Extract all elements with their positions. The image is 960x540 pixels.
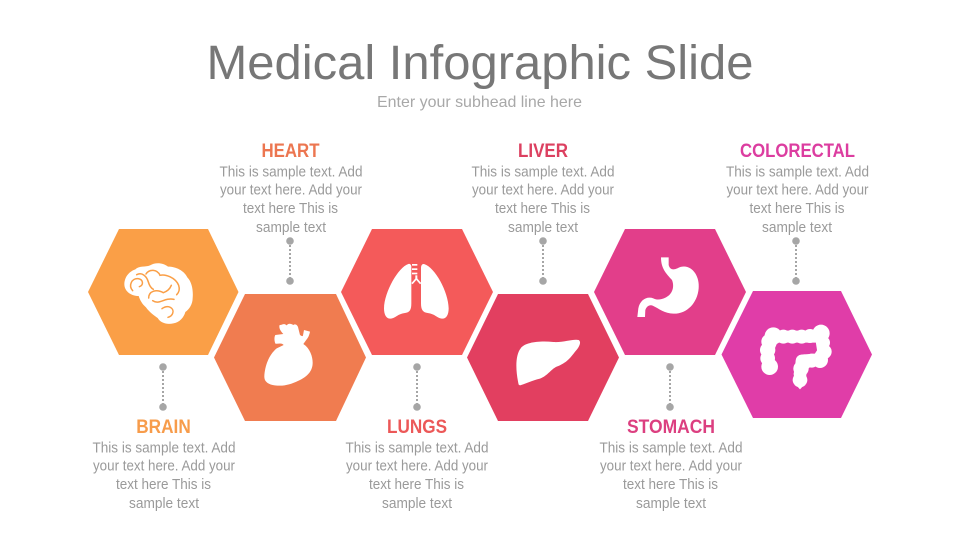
panel: brain: [88, 229, 238, 512]
heading: brain: BRAIN: [136, 417, 191, 438]
hexagon: brain: [88, 229, 238, 355]
connector: lungs: [413, 363, 421, 411]
hexagon: lungs: [341, 229, 493, 355]
text block: stomach: your text here. Add your: [600, 458, 742, 474]
text block: colorectal: sample text: [762, 220, 832, 236]
icon: stomach: [637, 257, 699, 317]
text block: lungs: This is sample text. Add: [346, 440, 489, 456]
panel: heart: [214, 141, 366, 421]
text block: stomach: [600, 440, 743, 512]
heading: heart: HEART: [262, 141, 320, 162]
panel: lungs: [341, 229, 493, 512]
text block: lungs: [346, 440, 489, 512]
connector: liver: [539, 237, 547, 285]
hexagon: heart: [214, 294, 366, 421]
text block: brain: [92, 440, 236, 512]
panel: liver: [467, 141, 619, 421]
icon: colorectal: [760, 325, 832, 389]
icon: brain: [124, 263, 193, 324]
text block: colorectal: your text here. Add your: [726, 182, 869, 198]
text block: colorectal: [726, 164, 869, 236]
hexagon: stomach: [594, 229, 746, 355]
text block: brain: text here This is: [116, 477, 211, 493]
title: Medical Infographic Slide: [206, 37, 754, 90]
text block: liver: [472, 164, 615, 236]
text block: colorectal: This is sample text. Add: [726, 164, 869, 180]
heading: liver: LIVER: [518, 141, 568, 162]
icon: heart: [264, 324, 313, 386]
text block: stomach: This is sample text. Add: [600, 440, 743, 456]
panel: colorectal: [722, 141, 872, 418]
text block: lungs: your text here. Add your: [346, 458, 488, 474]
text block: stomach: text here This is: [623, 477, 718, 493]
text block: brain: This is sample text. Add: [92, 440, 236, 456]
text block: stomach: sample text: [636, 496, 706, 512]
text block: liver: sample text: [508, 220, 578, 236]
text block: heart: sample text: [256, 220, 326, 236]
text block: liver: your text here. Add your: [472, 182, 614, 198]
hexagon: colorectal: [722, 291, 872, 418]
connector: heart: [286, 237, 294, 285]
connector: brain: [159, 363, 167, 411]
text block: lungs: text here This is: [369, 477, 464, 493]
connector: colorectal: [792, 237, 800, 285]
text block: brain: sample text: [129, 496, 199, 512]
text block: colorectal: text here This is: [750, 201, 844, 217]
text block: liver: This is sample text. Add: [472, 164, 615, 180]
text block: lungs: sample text: [382, 496, 452, 512]
text block: heart: your text here. Add your: [220, 182, 362, 198]
heading: stomach: STOMACH: [627, 417, 715, 438]
heading: lungs: LUNGS: [387, 417, 447, 438]
hexagon: liver: [467, 294, 619, 421]
icon: lungs: [384, 264, 449, 319]
panel: stomach: [594, 229, 746, 512]
icon: liver: [516, 340, 580, 385]
text block: brain: your text here. Add your: [93, 458, 235, 474]
text block: heart: text here This is: [243, 201, 338, 217]
subhead: Enter your subhead line here: [377, 94, 582, 111]
text block: liver: text here This is: [495, 201, 590, 217]
text block: heart: [220, 164, 363, 236]
connector: stomach: [666, 363, 674, 411]
text block: heart: This is sample text. Add: [220, 164, 363, 180]
heading: colorectal: COLORECTAL: [740, 141, 855, 162]
